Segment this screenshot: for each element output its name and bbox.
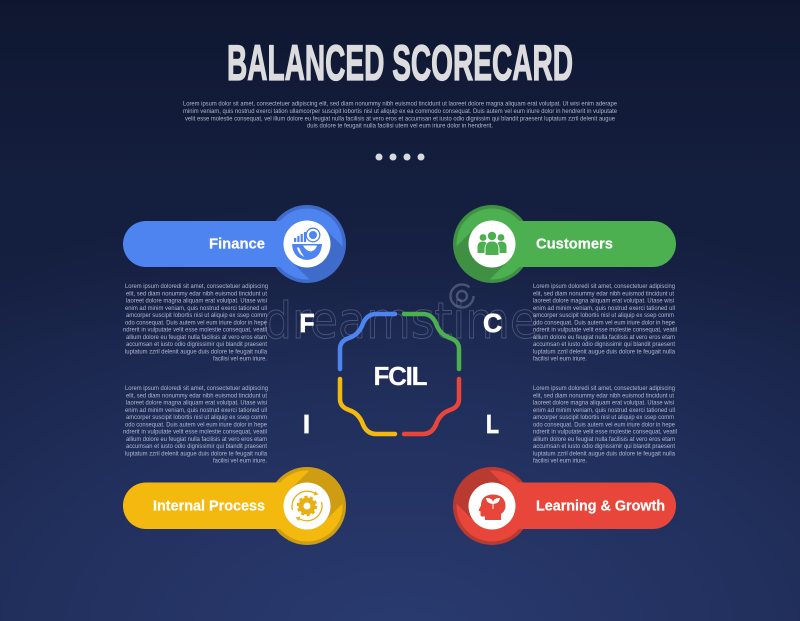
text block: Learning & Growth: luptatum zzril delenit augue duis dolore te feugait nulla: [533, 450, 676, 457]
text block: Finance: enim ad minim veniam, quis nostrud exerci tationed ull: [125, 305, 267, 312]
label: Customers: Customers: [536, 236, 613, 252]
text block: Internal Process: allium dolore eu feugiat nulla facilisis at vero eros etam: [126, 436, 267, 443]
text block: Internal Process: laoreet dolore magna aliquam erat volutpat. Utase wisi: [126, 400, 267, 406]
text block: Learning & Growth: Lorem ipsum doloredi sit amet, consectetuer adipiscing: [533, 385, 675, 392]
center diagram: FCIL frame: [340, 314, 459, 434]
intro text: duis dolore te feugait nulla facilisi utem vel eum iriure dolor in hendrerit.: [307, 122, 493, 130]
text block: Learning & Growth: accumsan et iusto odio dignissimir qui blandit praesent: [533, 443, 675, 450]
text block: Internal Process: accumsan et iusto odio dignissimir qui blandit praesent: [126, 443, 267, 450]
text block: Internal Process: ndrerit in vulputate velit esse molestie consequat, veatil: [123, 428, 267, 436]
text block: Learning & Growth: ndrerit in vulputate velit esse molestie consequat, veatil: [533, 428, 677, 436]
text block: Finance: facilisi vel eum iriure.: [213, 356, 267, 362]
text block: Customers: enim ad minim veniam, quis nostrud exerci tationed ull: [533, 305, 675, 312]
label: Learning & Growth: Learning & Growth: [536, 498, 665, 514]
text block: Finance: Lorem ipsum doloredi sit amet, consectetuer adipiscing: [125, 283, 268, 290]
text block: Finance: allium dolore eu feugiat nulla facilisis at vero eros etam: [126, 334, 267, 341]
text block: Finance: ndrerit in vulputate velit esse molestie consequat, veatil: [123, 326, 267, 334]
text block: Customers: Lorem ipsum doloredi sit amet, consectetuer adipiscing: [533, 283, 675, 290]
intro text: velit esse molestie consequat, vel illum dolore eu feugiat nulla facilisis at vero eros et accumsan et iusto odio dignissim qui blandit praesent luptatum zzril delenit augue: [185, 115, 616, 122]
letter I: I: [303, 409, 310, 439]
text block: Internal Process: facilisi vel eum iriure.: [213, 458, 267, 464]
text block: Customers: ndrerit in vulputate velit esse molestie consequat, veatil: [533, 326, 677, 334]
panel: Learning & Growth header: [453, 467, 676, 545]
text block: Learning & Growth: amcorper suscipit lobortis nisl ut aliquip ex ssep comm: [533, 414, 674, 421]
intro text: minim veniam, quis nostrud exerci tation ullamcorper suscipit lobortis nisl ut aliquip ex ea commodo consequat. Duis autem vel eum iriure dolor in hendrerit in vulputate: [183, 108, 618, 115]
text block: Finance: elit, sed diam nonummy edar nibh euismod tincidunt ut: [126, 290, 267, 297]
intro text: Lorem ipsum dolor sit amet, consectetuer adipiscing elit, sed diam nonummy nibh euismod tincidunt ut laoreet dolore magna aliquam erat volutpat. Ut wisi enim aderape: [183, 100, 618, 108]
text block: Learning & Growth: laoreet dolore magna aliquam erat volutpat. Utase wisi: [533, 400, 674, 406]
watermark: dreamstime: [263, 292, 538, 350]
text block: Customers: accumsan et iusto odio dignissimir qui blandit praesent: [533, 341, 675, 348]
text block: Customers: laoreet dolore magna aliquam erat volutpat. Utase wisi: [533, 298, 674, 304]
text block: Learning & Growth: allium dolore eu feugiat nulla facilisis at vero eros etam: [533, 436, 675, 443]
text block: Internal Process: Lorem ipsum doloredi sit amet, consectetuer adipiscing: [125, 385, 268, 392]
icon: finance globe and chart: [292, 228, 322, 260]
letter L: L: [486, 409, 499, 439]
text block: Learning & Growth: elit, sed diam nonummy edar nibh euismod tincidunt ut: [533, 392, 674, 399]
text block: Finance: laoreet dolore magna aliquam erat volutpat. Utase wisi: [126, 298, 267, 304]
center label: FCIL: FCIL: [374, 361, 428, 391]
label: Finance: Finance: [209, 236, 265, 252]
label: Internal Process: Internal Process: [153, 498, 265, 514]
text block: Finance: [123, 283, 268, 362]
text block: Learning & Growth: enim ad minim veniam, quis nostrud exerci tationed ull: [533, 407, 675, 414]
pagination dots: [376, 154, 424, 160]
text block: Internal Process: odo consequat. Duis autem vel eum iriure dolor in hepe: [125, 421, 268, 428]
text block: Internal Process: amcorper suscipit lobortis nisl ut aliquip ex ssep comm: [126, 414, 267, 421]
text block: Customers: elit, sed diam nonummy edar nibh euismod tincidunt ut: [533, 290, 674, 297]
text block: Finance: accumsan et iusto odio dignissimir qui blandit praesent: [126, 341, 267, 348]
text block: Learning & Growth: facilisi vel eum iriure.: [533, 458, 587, 464]
text block: Internal Process: luptatum zzril delenit augue duis dolore te feugait nulla: [125, 450, 268, 457]
text block: Internal Process: [123, 385, 268, 464]
text block: Customers: luptatum zzril delenit augue duis dolore te feugait nulla: [533, 348, 676, 355]
text block: Finance: amcorper suscipit lobortis nisl ut aliquip ex ssep comm: [126, 312, 267, 319]
text block: Internal Process: elit, sed diam nonummy edar nibh euismod tincidunt ut: [126, 392, 267, 399]
text block: Customers: odo consequat. Duis autem vel eum iriure dolor in hepe: [533, 319, 676, 326]
text block: Finance: odo consequat. Duis autem vel eum iriure dolor in hepe: [125, 319, 268, 326]
text block: Customers: allium dolore eu feugiat nulla facilisis at vero eros etam: [533, 334, 675, 341]
icon: customers group: [478, 232, 506, 255]
panel: Internal Process header: [123, 467, 346, 545]
panel: Customers header: [453, 205, 676, 283]
letter F: F: [300, 308, 314, 338]
text block: Internal Process: enim ad minim veniam, quis nostrud exerci tationed ull: [125, 407, 267, 414]
text block: Customers: facilisi vel eum iriure.: [533, 356, 587, 362]
panel: Finance header: [123, 205, 346, 283]
text block: Customers: amcorper suscipit lobortis nisl ut aliquip ex ssep comm: [533, 312, 674, 319]
text block: Finance: luptatum zzril delenit augue duis dolore te feugait nulla: [125, 348, 268, 355]
icon: gear with cycle arrows: [292, 491, 322, 521]
text block: Customers: [533, 283, 677, 362]
text block: Learning & Growth: odo consequat. Duis autem vel eum iriure dolor in hepe: [533, 421, 676, 428]
text block: Learning & Growth: [533, 385, 677, 464]
icon: head with sprout: [478, 494, 506, 520]
intro text: [183, 100, 618, 130]
letter C: C: [483, 308, 502, 338]
